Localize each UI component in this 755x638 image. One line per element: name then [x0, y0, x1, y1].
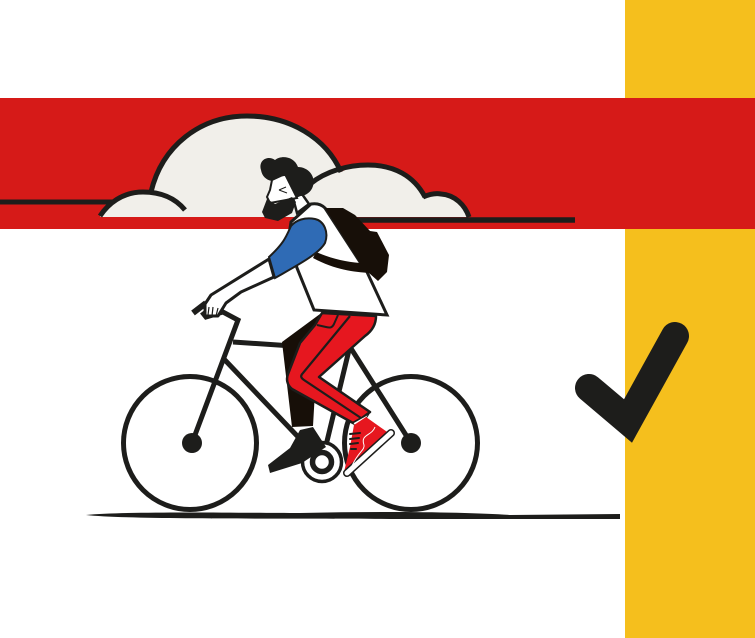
closed eye [279, 187, 287, 193]
shoe sole [347, 433, 391, 473]
trouser seam [301, 316, 361, 418]
red shoe [344, 417, 391, 473]
chainring [302, 442, 342, 482]
cloud base line left [0, 200, 112, 204]
vest [289, 204, 387, 315]
neck [293, 194, 309, 213]
beard [262, 197, 296, 221]
red horizontal band [0, 98, 755, 229]
pocket [317, 315, 338, 328]
shoe stripe [352, 427, 375, 466]
handlebar grip [193, 303, 206, 313]
rear wheel [124, 376, 256, 510]
back leg [282, 314, 320, 427]
rider [205, 157, 391, 473]
ground line [86, 512, 620, 519]
back shoe [268, 427, 326, 473]
blue sleeve [269, 218, 326, 278]
front hub [401, 433, 421, 453]
yellow vertical band [625, 0, 755, 638]
cloud [0, 116, 575, 220]
cloud base line right [356, 217, 575, 223]
bicycle [124, 303, 478, 510]
check mark [589, 336, 675, 421]
cuff [353, 414, 369, 426]
front wheel [344, 376, 478, 510]
frame [192, 312, 411, 462]
backpack [313, 208, 389, 281]
face [267, 174, 297, 203]
hair [260, 157, 314, 196]
fingers [208, 307, 218, 316]
laces [350, 433, 360, 449]
arm [205, 259, 274, 316]
red leg [287, 313, 376, 423]
rear hub [182, 433, 202, 453]
